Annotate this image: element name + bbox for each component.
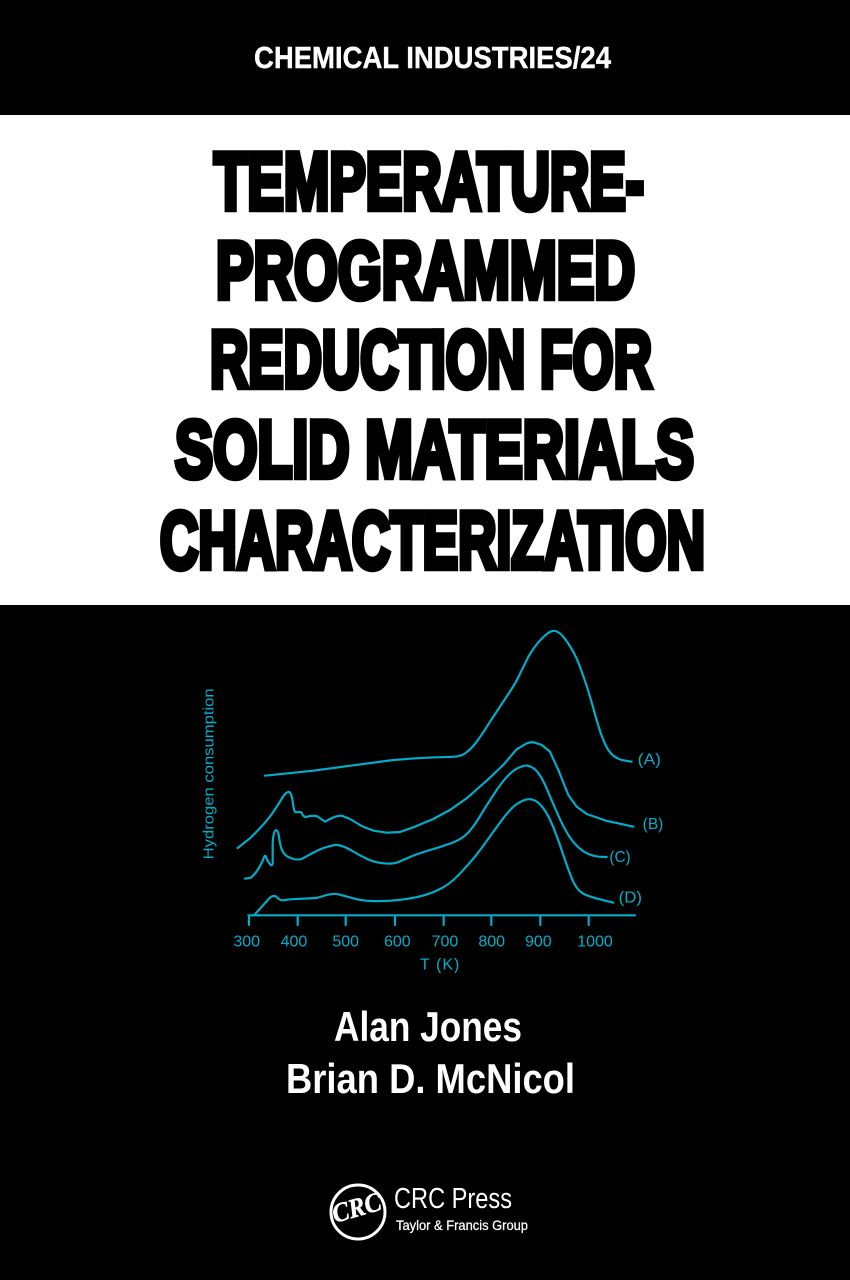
series label: CHEMICAL INDUSTRIES/24 (254, 40, 612, 75)
title: PROGRAMMED (216, 226, 635, 316)
authors: Brian D. McNicol (286, 1055, 575, 1102)
authors (286, 1003, 575, 1102)
curve labels (609, 751, 663, 907)
curve B (238, 742, 633, 848)
x axis labels: 900 (525, 933, 552, 950)
publisher logo (328, 1183, 528, 1239)
publisher logo: CRC (328, 1186, 386, 1229)
curve labels: (A) (638, 751, 661, 768)
curve labels: (C) (609, 849, 631, 866)
publisher name: CRC Press (394, 1183, 512, 1215)
curve labels: (D) (619, 890, 642, 907)
publisher logo: Taylor & Francis Group (396, 1217, 528, 1233)
x axis title: T (K) (420, 956, 459, 973)
x axis labels: 600 (384, 933, 411, 950)
curve labels: (B) (643, 816, 663, 833)
title (160, 137, 705, 586)
authors: Alan Jones (334, 1003, 522, 1050)
white title band (0, 115, 850, 605)
x axis labels (233, 933, 613, 950)
x axis labels: 1000 (577, 933, 613, 950)
TPR chart (201, 631, 663, 973)
x axis labels: 300 (233, 933, 260, 950)
x axis (248, 915, 635, 925)
curve C (245, 766, 607, 879)
x axis labels: 700 (432, 933, 458, 950)
x axis labels: 400 (281, 933, 307, 950)
x axis labels: 800 (478, 933, 505, 950)
curve D (254, 799, 613, 915)
icon: CRC circle (331, 1185, 385, 1239)
curve A (265, 631, 632, 776)
x axis labels: 500 (332, 933, 359, 950)
y axis label: Hydrogen consumption (201, 688, 217, 859)
title: TEMPERATURE- (214, 137, 644, 227)
